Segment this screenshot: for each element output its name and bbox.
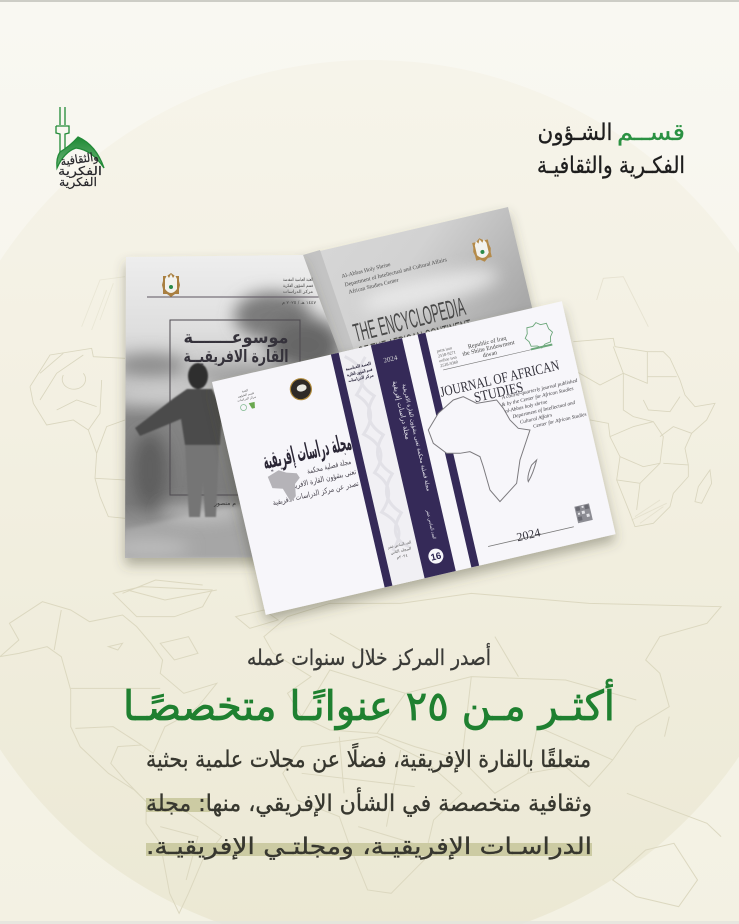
arabic subtitle — [267, 456, 360, 507]
band text top: العتبة العباسية — [345, 362, 372, 373]
spine title: مجلة فصلية محكمة تعنى بشؤون القارة الافريقية — [400, 383, 432, 492]
encyclopedia title: OF THE AFRICAN CONTINENT — [357, 317, 474, 362]
institution calligraphy left page: مركز الدراسات — [283, 289, 314, 295]
smoke and landscape photo — [105, 292, 342, 558]
smoke right page — [366, 264, 500, 314]
book: encyclopedia back cover: THE ENCYCLOPEDIA — [350, 291, 468, 348]
book: encyclopedia front cover — [105, 255, 342, 558]
band text top: مركز الدراسات — [348, 373, 375, 384]
issn block: print issn — [436, 345, 453, 354]
journal description: & by the Center for African Studies — [501, 385, 574, 408]
logo calligraphy: الفكرية — [58, 164, 102, 179]
arabic subtitle: تعنى بشؤون القارة الافريقية — [287, 467, 357, 492]
author text: م منصور — [213, 500, 236, 507]
journal english title — [439, 358, 564, 413]
header department name — [537, 120, 685, 179]
africa map left — [30, 277, 125, 518]
journal description: A course-quarterly journal published — [500, 378, 578, 401]
issue number badge: 16 — [430, 551, 443, 564]
small logos: العتبة — [241, 388, 249, 394]
logo minaret and dome — [56, 107, 104, 168]
decorative band — [339, 345, 425, 586]
arabic subtitle: تصدر عن مركز الدراسات الافريقية — [272, 479, 360, 507]
republic heading: diwan — [482, 350, 498, 359]
journal description: al-Abbas holy shrine — [505, 399, 549, 415]
issn block: 2518-9360 — [440, 359, 458, 368]
encyclopedia arabic title — [184, 328, 288, 367]
institution calligraphy left page: العتبة العباسية المقدسة — [283, 278, 313, 283]
encyclopedia arabic title: القارة الافريقيــة — [184, 347, 288, 367]
journal description — [499, 378, 587, 436]
header rule — [443, 349, 531, 370]
institution calligraphy left page: ١٤٤٧ هـ / ٢٠٢٥ م — [282, 300, 317, 306]
journal description: Cultural Affairs — [519, 411, 553, 426]
institution text right page: African Studies Center — [348, 276, 399, 296]
spine title: العدد السادس عشر — [424, 509, 436, 540]
body paragraph: وثقافية متخصصة في الشأن الإفريقي، منها: مجلة — [146, 787, 592, 817]
band text top — [345, 362, 375, 384]
book: journal of african studies — [212, 301, 616, 615]
band text bottom: العدد السادس عشر — [386, 539, 412, 550]
small logos: قسم الشؤون — [237, 391, 255, 399]
issn block — [436, 344, 459, 368]
journal seal — [288, 377, 313, 402]
issn block: 2518-9271 — [437, 349, 456, 358]
year: 2024 — [515, 525, 542, 544]
emblem left page — [162, 273, 180, 297]
band text bottom: المجلد الثاني — [390, 546, 412, 555]
dark stripes — [331, 333, 479, 587]
institution calligraphy left page: قسم الشؤون الفكرية — [283, 283, 313, 289]
africa outline — [428, 397, 537, 502]
institution text right page — [341, 248, 450, 296]
top rule — [147, 296, 327, 298]
spine title: مجلة دراسات إفريقية — [391, 380, 412, 441]
arabic subtitle: مجلة فصلية محكمة — [306, 457, 352, 476]
spine title — [391, 378, 443, 541]
book: journal of african studies: مجلة دراسات إفريقية — [261, 430, 354, 475]
body paragraph: الدراسـات الإفريقيـة، ومجلتـي الإفريقيـة. — [146, 834, 592, 860]
title frame — [170, 320, 300, 495]
small logos — [235, 387, 259, 412]
institution calligraphy left page — [282, 278, 317, 306]
journal cover sheet — [212, 301, 616, 615]
republic heading — [460, 333, 517, 364]
encyclopedia title — [352, 298, 470, 348]
body paragraph: متعلقًا بالقارة الإفريقية، فضلًا عن مجلات علمية بحثية — [146, 743, 591, 773]
republic heading: Republic of Iraq — [467, 335, 507, 350]
logo calligraphy — [58, 149, 102, 190]
highlight bars — [146, 798, 592, 856]
emblem right page — [471, 236, 493, 264]
header department name: الشـؤون — [538, 120, 612, 146]
body paragraph — [146, 743, 592, 860]
logo — [56, 107, 104, 190]
journal english title: JOURNAL OF AFRICAN — [439, 358, 561, 401]
header department name: الفكـرية والثقافيـة — [537, 153, 685, 179]
logo calligraphy: والثقافية — [60, 149, 99, 170]
band text bottom: ٢٠٢٤م — [396, 553, 408, 560]
issue number badge — [427, 547, 445, 565]
green emblem — [522, 319, 555, 351]
child figure — [135, 363, 222, 517]
band text bottom — [386, 539, 414, 562]
header department name: قســم — [617, 120, 685, 146]
book: encyclopedia back cover — [303, 207, 535, 365]
bottom rule — [488, 526, 574, 547]
journal description: Department of Intellectual and — [511, 399, 576, 420]
republic heading: the Shiite Endowment — [462, 340, 516, 358]
journal english title: STUDIES — [473, 379, 525, 406]
world map outline — [0, 580, 721, 913]
africa map right — [573, 277, 715, 527]
small logos: مركز الدراسات — [237, 394, 257, 403]
grey africa silhouette — [267, 466, 305, 506]
journal description: Center for African Studies — [532, 411, 587, 430]
spine year: 2024 — [383, 354, 399, 365]
encyclopedia arabic title: موسوعـــــــة — [184, 328, 288, 348]
band text top: قسم الشؤون الفكرية — [346, 367, 373, 378]
institution text right page: Al-Abbas Holy Shrine — [341, 262, 392, 280]
qr code — [574, 503, 593, 523]
issn block: online issn — [439, 354, 458, 363]
intro text: أصدر المركز خلال سنوات عمله — [247, 643, 491, 671]
institution text right page: Department of Intellectual and Cultural Affairs — [344, 256, 448, 288]
logo calligraphy: الفكرية — [59, 175, 97, 190]
spine — [303, 250, 358, 365]
headline: أكثـر مـن ٢٥ عنوانًـا متخصصًـا — [123, 679, 615, 730]
